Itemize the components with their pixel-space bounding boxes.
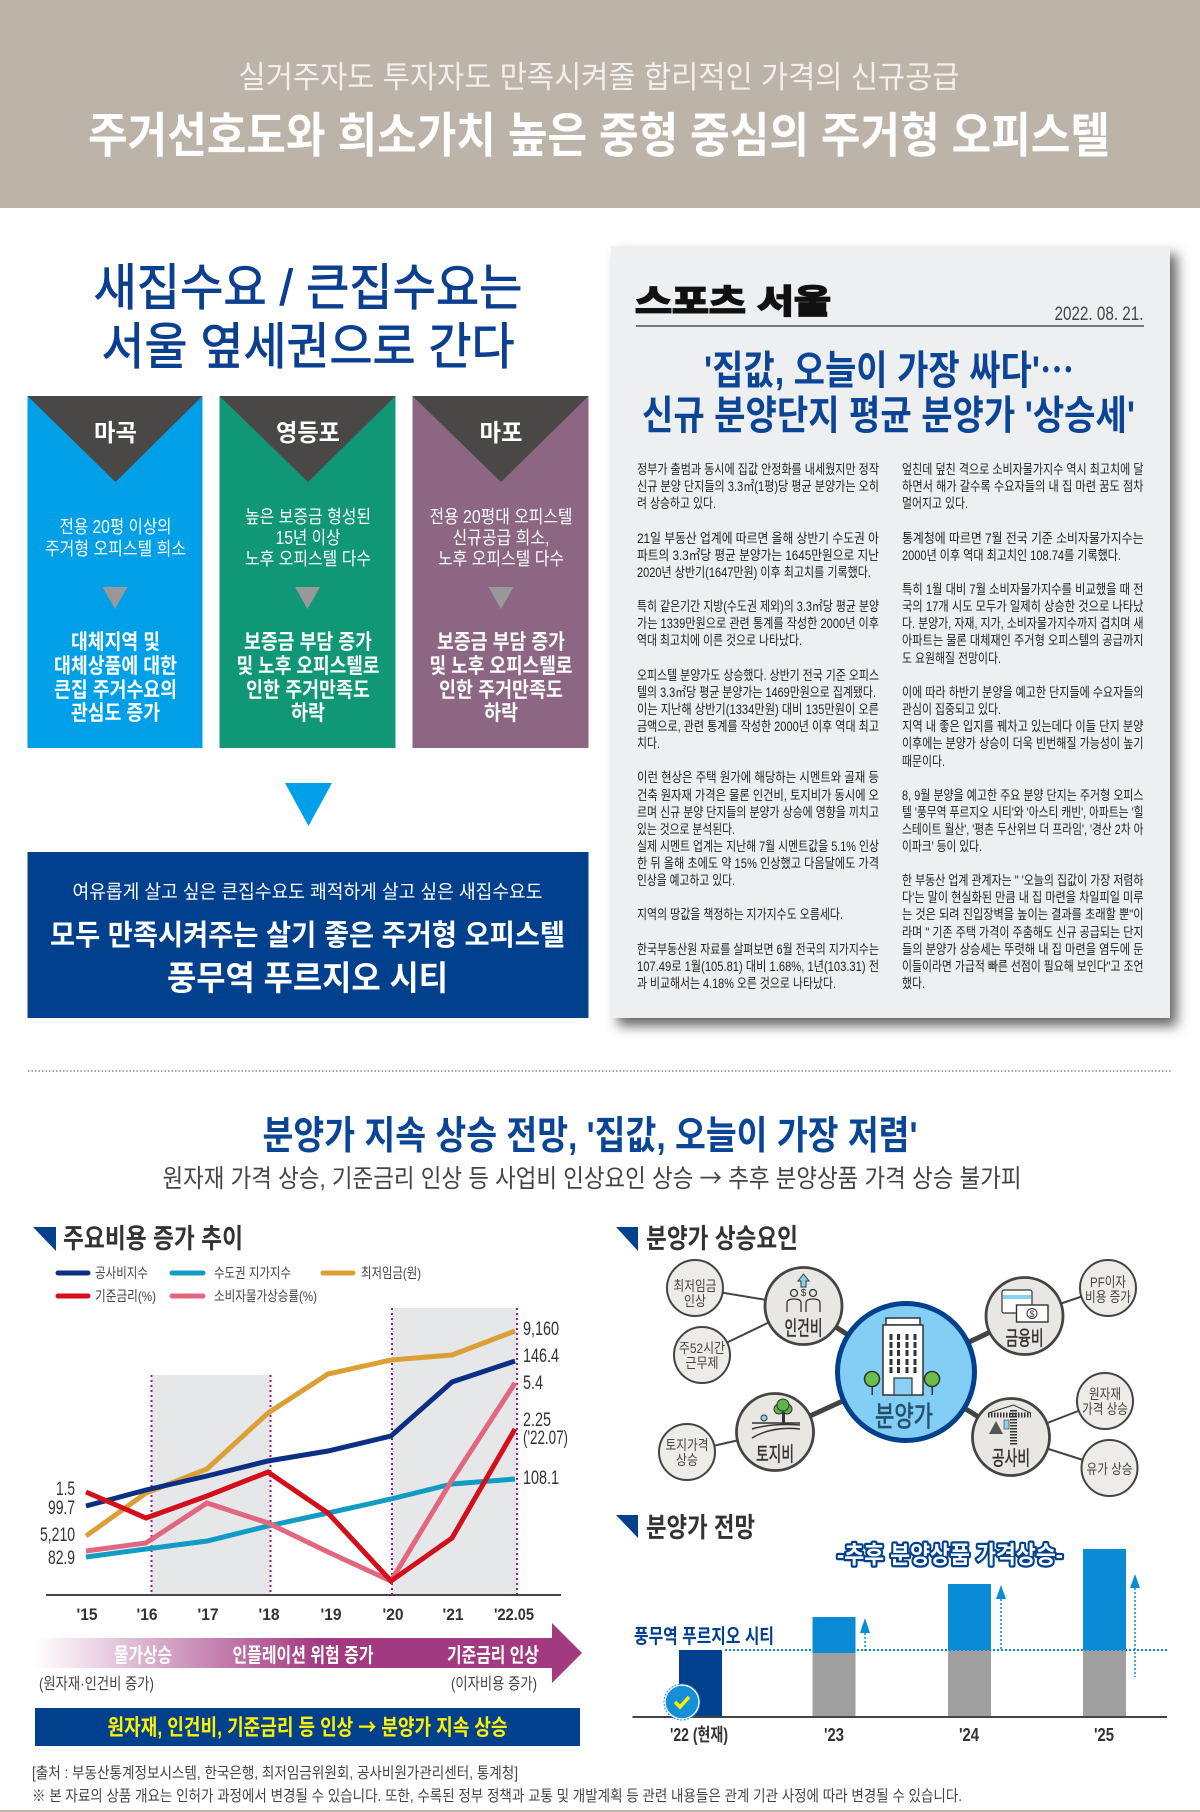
arrow captions bbox=[39, 1675, 537, 1693]
article body column 1: 과 비교해서는 4.18% 오른 것으로 나타났다. bbox=[637, 976, 836, 991]
article body column 2: 이파크' 등이 있다. bbox=[902, 839, 982, 854]
diagram: price rise factors bbox=[659, 1260, 1138, 1496]
chart value labels: 5,210 bbox=[40, 1525, 75, 1546]
article body column 2: 들의 분양가 상승세는 뚜렷해 내 집 마련을 염두에 둔 bbox=[902, 942, 1144, 957]
article body column 1: 한국부동산원 자료를 살펴보면 6월 전국의 지가지수는 bbox=[637, 942, 879, 957]
arrow captions: (원자재·인건비 증가) bbox=[39, 1675, 154, 1693]
chart year axis: '17 bbox=[198, 1605, 218, 1624]
small factor circles: 원자재 bbox=[1089, 1386, 1121, 1402]
small factor circles: PF이자 bbox=[1090, 1274, 1126, 1290]
panel: 영등포 bbox=[220, 396, 396, 748]
article body column 1: 지역의 땅값을 책정하는 지가지수도 오름세다. bbox=[637, 907, 843, 922]
factor: 토지비: 토지비 bbox=[756, 1443, 794, 1466]
small factor circles: 비용 증가 bbox=[1085, 1289, 1131, 1305]
chart value labels bbox=[40, 1319, 568, 1569]
chart value labels: 82.9 bbox=[48, 1548, 75, 1569]
panel: 마포: 및 노후 오피스텔로 bbox=[430, 655, 572, 678]
chart legend: 수도권 지가지수 bbox=[214, 1265, 291, 1281]
panel: newspaper article bbox=[611, 246, 1177, 1026]
panel: 마곡 bbox=[28, 396, 202, 748]
callout: summary bar bbox=[35, 1708, 580, 1746]
panel: 마곡: 주거형 오피스텔 희소 bbox=[45, 539, 186, 559]
article headline: '집값, 오늘이 가장 싸다'⋯ bbox=[704, 338, 1074, 396]
article body column 2 bbox=[902, 462, 1144, 991]
article body column 2: 통계청에 따르면 7월 전국 기준 소비자물가지수는 bbox=[902, 531, 1144, 546]
year labels: '24 bbox=[959, 1725, 979, 1745]
article body column 2: 관심이 집중되고 있다. bbox=[902, 702, 1001, 717]
small factor circles: 토지가격 bbox=[666, 1437, 708, 1453]
chart year axis: '20 bbox=[382, 1605, 404, 1624]
article body column 1: 특히 같은기간 지방(수도권 제외)의 3.3㎡당 평균 분양 bbox=[637, 599, 879, 614]
chart value labels: 2.25 bbox=[523, 1410, 551, 1431]
panel: 마곡: 대체지역 및 bbox=[71, 631, 160, 654]
chart value labels: 9,160 bbox=[523, 1319, 559, 1340]
article body column 2: 도 요원해질 전망이다. bbox=[902, 651, 1001, 666]
article headline bbox=[642, 338, 1135, 438]
article body column 1: 2020년 상반기(1647만원) 이후 최고치를 기록했다. bbox=[637, 565, 871, 580]
article body column 2: 하면서 해가 갈수록 수요자들의 내 집 마련 꿈도 점차 bbox=[902, 479, 1144, 494]
panel: 영등포: 및 노후 오피스텔로 bbox=[236, 655, 380, 678]
chart legend: 소비자물가상승률(%) bbox=[214, 1288, 317, 1304]
panel: 마곡: 큰집 주거수요의 bbox=[54, 679, 177, 702]
year labels: '22 (현재) bbox=[670, 1725, 728, 1745]
panel: 마곡: 마곡 bbox=[94, 420, 137, 447]
article body column 2: 는 것은 되려 진입장벽을 높이는 결과를 초래할 뿐"이 bbox=[902, 907, 1144, 922]
article body column 1: 인상을 예고하고 있다. bbox=[637, 873, 735, 888]
article body column 1: 려 상승하고 있다. bbox=[637, 496, 716, 511]
article body column 2: 이에 따라 하반기 분양을 예고한 단지들에 수요자들의 bbox=[902, 685, 1144, 700]
header subtitle: 실거주자도 투자자도 만족시켜줄 합리적인 가격의 신규공급 bbox=[238, 60, 960, 95]
article body column 2: 아파트는 물론 대체재인 주거형 오피스텔의 공급까지 bbox=[902, 633, 1144, 648]
chart legend: 공사비지수 bbox=[95, 1265, 148, 1281]
article body column 1: 르며 신규 분양 단지들의 분양가 상승에 영향을 끼치고 bbox=[637, 805, 879, 820]
article body column 2: 이들이라면 가급적 빠른 선점이 필요해 보인다"고 조언 bbox=[902, 959, 1144, 974]
header banner bbox=[0, 0, 1200, 208]
panel: 마곡: 전용 20평 이상의 bbox=[60, 517, 172, 537]
article body column 1: 오피스텔 분양가도 상승했다. 상반기 전국 기준 오피스 bbox=[637, 668, 879, 683]
article body column 1: 이는 지난해 상반기(1334만원) 대비 135만원이 오른 bbox=[637, 702, 879, 717]
article body column 1: 치다. bbox=[637, 736, 660, 751]
panel: 마곡: 대체상품에 대한 bbox=[54, 655, 177, 678]
article body column 2: 스테이트 월산', '평촌 두산위브 더 프라임', '경산 2차 아 bbox=[902, 822, 1144, 837]
panel: 마포: 보증금 부담 증가 bbox=[437, 631, 565, 654]
panel: 영등포: 영등포 bbox=[276, 420, 340, 447]
year labels: '25 bbox=[1094, 1725, 1114, 1745]
section subheading: 원자재 가격 상승, 기준금리 인상 등 사업비 인상요인 상승 → 추후 분양상품 가격 상승 불가피 bbox=[162, 1159, 1022, 1195]
article body column 2: 다'는 말이 현실화된 만큼 내 집 마련을 차일피일 미루 bbox=[902, 890, 1144, 905]
bar chart: price outlook bbox=[632, 1549, 1169, 1745]
panel: 영등포: 인한 주거만족도 bbox=[246, 679, 370, 702]
small factor circles bbox=[659, 1260, 1138, 1496]
left heading: 새집수요 / 큰집수요는 bbox=[94, 260, 522, 316]
factor: 공사비: 공사비 bbox=[992, 1447, 1030, 1470]
article body column 2: 8, 9월 분양을 예고한 주요 분양 단지는 주거형 오피스 bbox=[902, 788, 1144, 803]
article body column 2: 했다. bbox=[902, 976, 925, 991]
article body column 2: 엎친데 덮친 격으로 소비자물가지수 역시 최고치에 달 bbox=[902, 462, 1144, 477]
panel: 마포: 하락 bbox=[484, 702, 518, 725]
chart year axis: '15 bbox=[76, 1605, 98, 1624]
chart year axis: '21 bbox=[442, 1605, 464, 1624]
footnotes: ※ 본 자료의 상품 개요는 인허가 과정에서 변경될 수 있습니다. 또한, 수록된 정부 정책과 교통 및 개발계획 등 관련 내용들은 관계 기관 사정에 따라 변경될 수 있습니다. bbox=[32, 1787, 962, 1805]
chart value labels: 108.1 bbox=[523, 1468, 559, 1489]
left heading: 서울 옆세권으로 간다 bbox=[102, 319, 514, 375]
article body column 2: 국의 17개 시도 모두가 일제히 상승한 것으로 나타났 bbox=[902, 599, 1144, 614]
chart year axis: '22.05 bbox=[494, 1605, 534, 1624]
factor: 인건비 bbox=[765, 1268, 842, 1344]
heading: 주요비용 증가 추이: 주요비용 증가 추이 bbox=[63, 1224, 243, 1254]
article body column 2: 이후에는 분양가 상승이 더욱 빈번해질 가능성이 높기 bbox=[902, 736, 1144, 751]
heading: 분양가 전망 bbox=[616, 1513, 755, 1543]
center circle: 분양가: 분양가 bbox=[875, 1401, 933, 1432]
small factor circles: 최저임금 bbox=[674, 1278, 717, 1294]
article body column 1 bbox=[637, 462, 879, 991]
article body column 2: 라며 " 기존 주택 가격이 주춤해도 신규 공급되는 단지 bbox=[902, 925, 1144, 940]
icon: check badge bbox=[664, 1684, 700, 1720]
header title: 주거선호도와 희소가치 높은 중형 중심의 주거형 오피스텔 bbox=[88, 110, 1110, 163]
chart legend bbox=[58, 1265, 421, 1304]
panel: conclusion box: 모두 만족시켜주는 살기 좋은 주거형 오피스텔 bbox=[50, 919, 565, 952]
bar label: 풍무역 푸르지오 시티: 풍무역 푸르지오 시티 bbox=[634, 1625, 774, 1648]
article body column 1: 텔의 3.3㎡당 평균 분양가는 1469만원으로 집계됐다. bbox=[637, 685, 876, 700]
factor: 토지비 bbox=[736, 1394, 814, 1470]
arrow: down to conclusion bbox=[285, 783, 332, 826]
year labels: '23 bbox=[824, 1725, 844, 1745]
chart value labels: 5.4 bbox=[523, 1373, 543, 1394]
article body column 2: 2000년 이후 역대 최고치인 108.74를 기록했다. bbox=[902, 548, 1121, 563]
footnotes: [출처 : 부동산통계정보시스템, 한국은행, 최저임금위원회, 공사비원가관리센터, 통계청] bbox=[32, 1764, 518, 1782]
heading: 분양가 상승요인: 분양가 상승요인 bbox=[646, 1224, 798, 1254]
small factor circles: 근무제 bbox=[686, 1355, 718, 1371]
chart legend: 최저임금(원) bbox=[361, 1265, 421, 1281]
factor: 금융비 bbox=[986, 1278, 1063, 1354]
article body column 2: 텔 '풍무역 푸르지오 시티'와 '아스티 캐빈', 아파트는 '힐 bbox=[902, 805, 1144, 820]
small factor circles: 인상 bbox=[684, 1293, 706, 1309]
article body column 1: 정부가 출범과 동시에 집값 안정화를 내세웠지만 정작 bbox=[637, 462, 879, 477]
article body column 1: 건축 원자재 가격은 물론 인건비, 토지비가 동시에 오 bbox=[637, 788, 879, 803]
article body column 1: 신규 분양 단지들의 3.3㎡(1평)당 평균 분양가는 오히 bbox=[637, 479, 879, 494]
chart value labels: 1.5 bbox=[56, 1479, 75, 1500]
article body column 1: 역대 최고치에 이른 것으로 나타났다. bbox=[637, 633, 802, 648]
factor: 금융비: $ bbox=[1029, 1309, 1035, 1319]
chart title: 추후 분양상품 가격상승: -추후 분양상품 가격상승- bbox=[837, 1542, 1063, 1569]
chart year axis: '16 bbox=[136, 1605, 158, 1624]
arrow captions: (이자비용 증가) bbox=[451, 1675, 537, 1693]
panel: 마곡: 관심도 증가 bbox=[71, 702, 160, 725]
small factor circles: 유가 상승 bbox=[1086, 1461, 1133, 1477]
newspaper logo: 스포츠 서울 bbox=[635, 283, 831, 320]
panel: 마포: 마포 bbox=[480, 420, 522, 447]
panel: 마포: 노후 오피스텔 다수 bbox=[438, 549, 564, 569]
arrow: inflation trend: 물가상승 bbox=[114, 1644, 172, 1667]
panel: 마포 bbox=[412, 396, 588, 748]
line chart bbox=[40, 1308, 568, 1624]
article body column 1: 이런 현상은 주택 원가에 해당하는 시멘트와 골재 등 bbox=[637, 770, 879, 785]
chart value labels: 99.7 bbox=[48, 1498, 75, 1519]
factor: 인건비: 인건비 bbox=[784, 1317, 822, 1340]
article body column 2: 특히 1월 대비 7월 소비자물가지수를 비교했을 때 전 bbox=[902, 582, 1144, 597]
center circle: 분양가 bbox=[838, 1304, 974, 1440]
article body column 2: 때문이다. bbox=[902, 754, 945, 769]
panel: 영등포: 하락 bbox=[291, 702, 325, 725]
chart legend: 기준금리(%) bbox=[95, 1288, 156, 1304]
panel: 영등포: 높은 보증금 형성된 bbox=[245, 507, 371, 527]
panel: conclusion box bbox=[28, 852, 588, 1018]
arrow: inflation trend: 기준금리 인상 bbox=[447, 1644, 539, 1667]
small factor circles: 상승 bbox=[676, 1452, 698, 1468]
panel: 마포: 인한 주거만족도 bbox=[439, 679, 563, 702]
article body column 2: 멀어지고 있다. bbox=[902, 496, 968, 511]
arrow: inflation trend: 인플레이션 위험 증가 bbox=[232, 1644, 374, 1667]
chart year axis bbox=[76, 1605, 534, 1624]
factor: 금융비: 금융비 bbox=[1006, 1327, 1044, 1350]
panel: 마포: 전용 20평대 오피스텔 bbox=[430, 507, 572, 527]
article body column 1: 가는 1339만원으로 관련 통계를 작성한 2000년 이후 bbox=[637, 616, 879, 631]
article body column 1: 실제 시멘트 업계는 지난해 7월 시멘트값을 5.1% 인상 bbox=[637, 839, 879, 854]
panel: 마포: 신규공급 희소, bbox=[452, 528, 550, 548]
footnotes bbox=[32, 1764, 962, 1805]
article body column 1: 한 뒤 올해 초에도 약 15% 인상했고 다음달에도 가격 bbox=[637, 856, 879, 871]
small factor circles: 주52시간 bbox=[679, 1340, 725, 1356]
arrow: inflation trend bbox=[35, 1623, 582, 1683]
panel: 영등포: 노후 오피스텔 다수 bbox=[245, 549, 371, 569]
panel: 영등포: 보증금 부담 증가 bbox=[244, 631, 372, 654]
factor: 공사비 bbox=[972, 1398, 1050, 1476]
small factor circles: 가격 상승 bbox=[1082, 1401, 1128, 1417]
chart value labels: ('22.07) bbox=[523, 1428, 568, 1449]
article body column 2: 다. 분양가, 자재, 지가, 소비자물가지수까지 겹치며 새 bbox=[902, 616, 1144, 631]
factor: 인건비: $ bbox=[801, 1288, 807, 1299]
panel: conclusion box: 풍무역 푸르지오 시티 bbox=[167, 960, 448, 998]
article body column 1: 107.49로 1월(105.81) 대비 1.68%, 1년(103.31) 전 bbox=[637, 959, 879, 974]
article body column 1: 21일 부동산 업계에 따르면 올해 상반기 수도권 아 bbox=[637, 531, 879, 546]
article body column 1: 있는 것으로 분석된다. bbox=[637, 822, 735, 837]
heading: 분양가 전망: 분양가 전망 bbox=[646, 1513, 755, 1543]
left heading bbox=[94, 260, 522, 375]
chart year axis: '18 bbox=[258, 1605, 280, 1624]
chart value labels: 146.4 bbox=[523, 1346, 559, 1367]
article date: 2022. 08. 21. bbox=[1054, 304, 1144, 325]
chart year axis: '19 bbox=[320, 1605, 342, 1624]
article body column 2: 지역 내 좋은 입지를 꿰차고 있는데다 이들 단지 분양 bbox=[902, 719, 1144, 734]
article body column 1: 금액으로, 관련 통계를 작성한 2000년 이후 역대 최고 bbox=[637, 719, 879, 734]
panel: conclusion box: 여유롭게 살고 싶은 큰집수요도 쾌적하게 살고 싶은 새집수요도 bbox=[72, 881, 542, 903]
year labels bbox=[670, 1725, 1114, 1745]
section heading: 분양가 지속 상승 전망, '집값, 오늘이 가장 저렴' bbox=[262, 1115, 918, 1158]
article body column 2: 한 부동산 업계 관계자는 " '오늘의 집값이 가장 저렴하 bbox=[902, 873, 1144, 888]
article body column 1: 파트의 3.3㎡당 평균 분양가는 1645만원으로 지난 bbox=[637, 548, 879, 563]
panel: 영등포: 15년 이상 bbox=[276, 528, 340, 548]
callout: summary bar: 원자재, 인건비, 기준금리 등 인상 → 분양가 지속 상승 bbox=[108, 1710, 508, 1742]
rise arrows bbox=[860, 1574, 1140, 1677]
